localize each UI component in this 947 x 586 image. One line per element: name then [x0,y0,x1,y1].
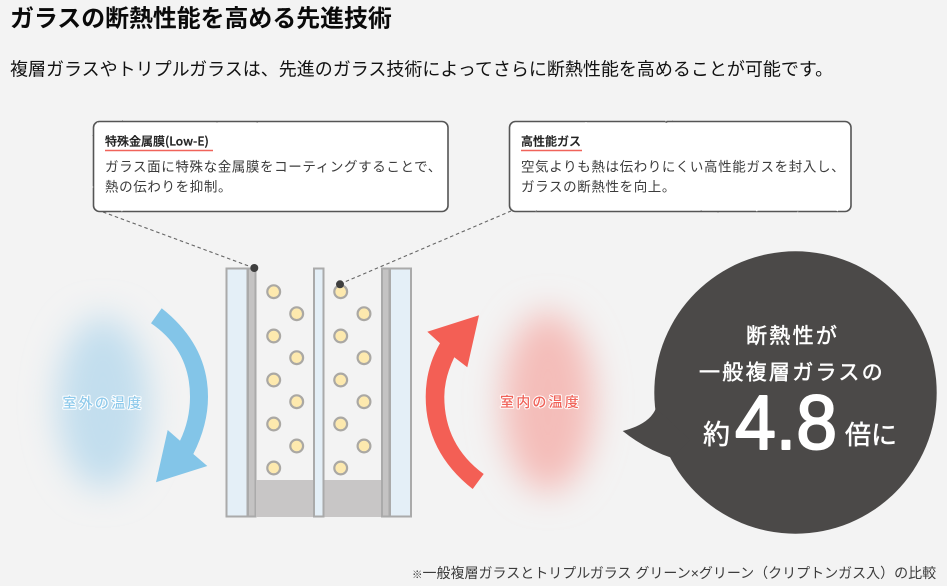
label: indoor temperature: 室内の温度 [500,392,581,412]
callout heading: 高性能ガス [521,132,581,150]
title: ガラスの断熱性能を高める先進技術 [10,6,392,32]
red underline [521,150,582,152]
arrow: red indoor [426,315,484,489]
callout body: ガラス面に特殊な金属膜をコーティングすることで、 [105,160,442,174]
bubble line 2: 一般複層ガラスの [699,362,885,384]
gas particles [267,285,370,474]
red underline [105,150,213,152]
glass unit diagram [226,264,411,517]
speech bubble [623,251,937,534]
outdoor temperature glow [57,317,149,489]
Low-E coating right [382,268,390,516]
callout body: ガラスの断熱性を向上。 [521,180,676,194]
spacer [256,480,382,517]
leader line: Low-E [103,212,254,268]
callout body: 熱の伝わりを抑制。 [105,180,232,194]
outer left pane [226,268,248,516]
subtitle: 複層ガラスやトリプルガラスは、先進のガラス技術によってさらに断熱性能を高めることが可能です。 [10,60,833,80]
pointer dot: gas [336,280,344,288]
bubble line 1: 断熱性が [746,325,839,348]
bubble prefix: 約 [703,420,730,450]
pointer dot: Low-E [250,264,258,272]
callout: Low-E [93,121,448,212]
footnote: ※一般複層ガラスとトリプルガラス グリーン×グリーン（クリプトンガス入）の比較 [412,565,936,581]
indoor temperature glow [502,312,594,492]
Low-E coating left [248,268,256,516]
center pane [314,268,324,516]
outer right pane [390,268,411,516]
callout: high performance gas [509,121,851,212]
leader line: gas [340,211,511,284]
callout heading: 特殊金属膜(Low-E) [105,132,209,150]
arrow: blue outdoor [151,308,208,482]
label: outdoor temperature: 室外の温度 [62,393,144,413]
bubble suffix: 倍に [845,420,897,450]
bubble number: 4.8 [735,380,837,466]
callout body: 空気よりも熱は伝わりにくい高性能ガスを封入し、 [521,158,845,174]
